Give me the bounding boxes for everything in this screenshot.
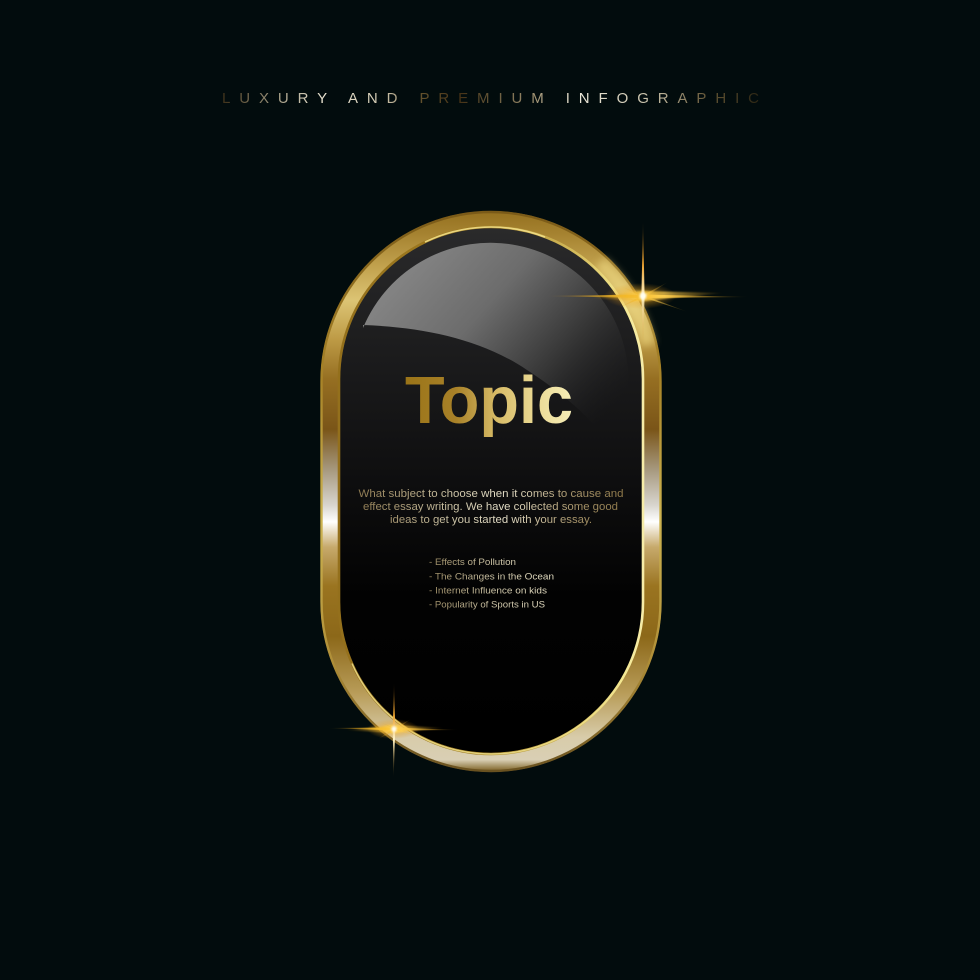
intro paragraph: effect essay writing. We have collected some good [363, 501, 618, 513]
panel: gold capsule frame [320, 211, 662, 772]
intro paragraph [358, 488, 624, 526]
topic list [429, 557, 554, 610]
icon: sparkle bottom left [328, 682, 458, 778]
intro paragraph: ideas to get you started with your essay. [390, 514, 592, 526]
bottom inner highlight [352, 664, 618, 754]
topic list: - Effects of Pollution [429, 557, 516, 568]
gold ring [320, 211, 662, 772]
icon: sparkle top right [545, 220, 750, 348]
glass reflection [363, 242, 620, 402]
topic list: - Internet Influence on kids [429, 586, 547, 596]
topic list: - The Changes in the Ocean [429, 572, 554, 582]
intro paragraph: What subject to choose when it comes to cause and [358, 488, 624, 500]
title: Topic: Topic [405, 363, 573, 438]
ring glow near sparkle [600, 262, 648, 345]
ring inner edge [339, 227, 643, 754]
dark glass panel [340, 228, 642, 753]
header: luxury and premium infographic: LUXURY AND PREMIUM INFOGRAPHIC [222, 90, 759, 107]
topic list: - Popularity of Sports in US [429, 600, 545, 610]
infographic canvas [223, 93, 758, 774]
top inner highlight [425, 227, 545, 242]
ring outer edge [322, 212, 660, 771]
